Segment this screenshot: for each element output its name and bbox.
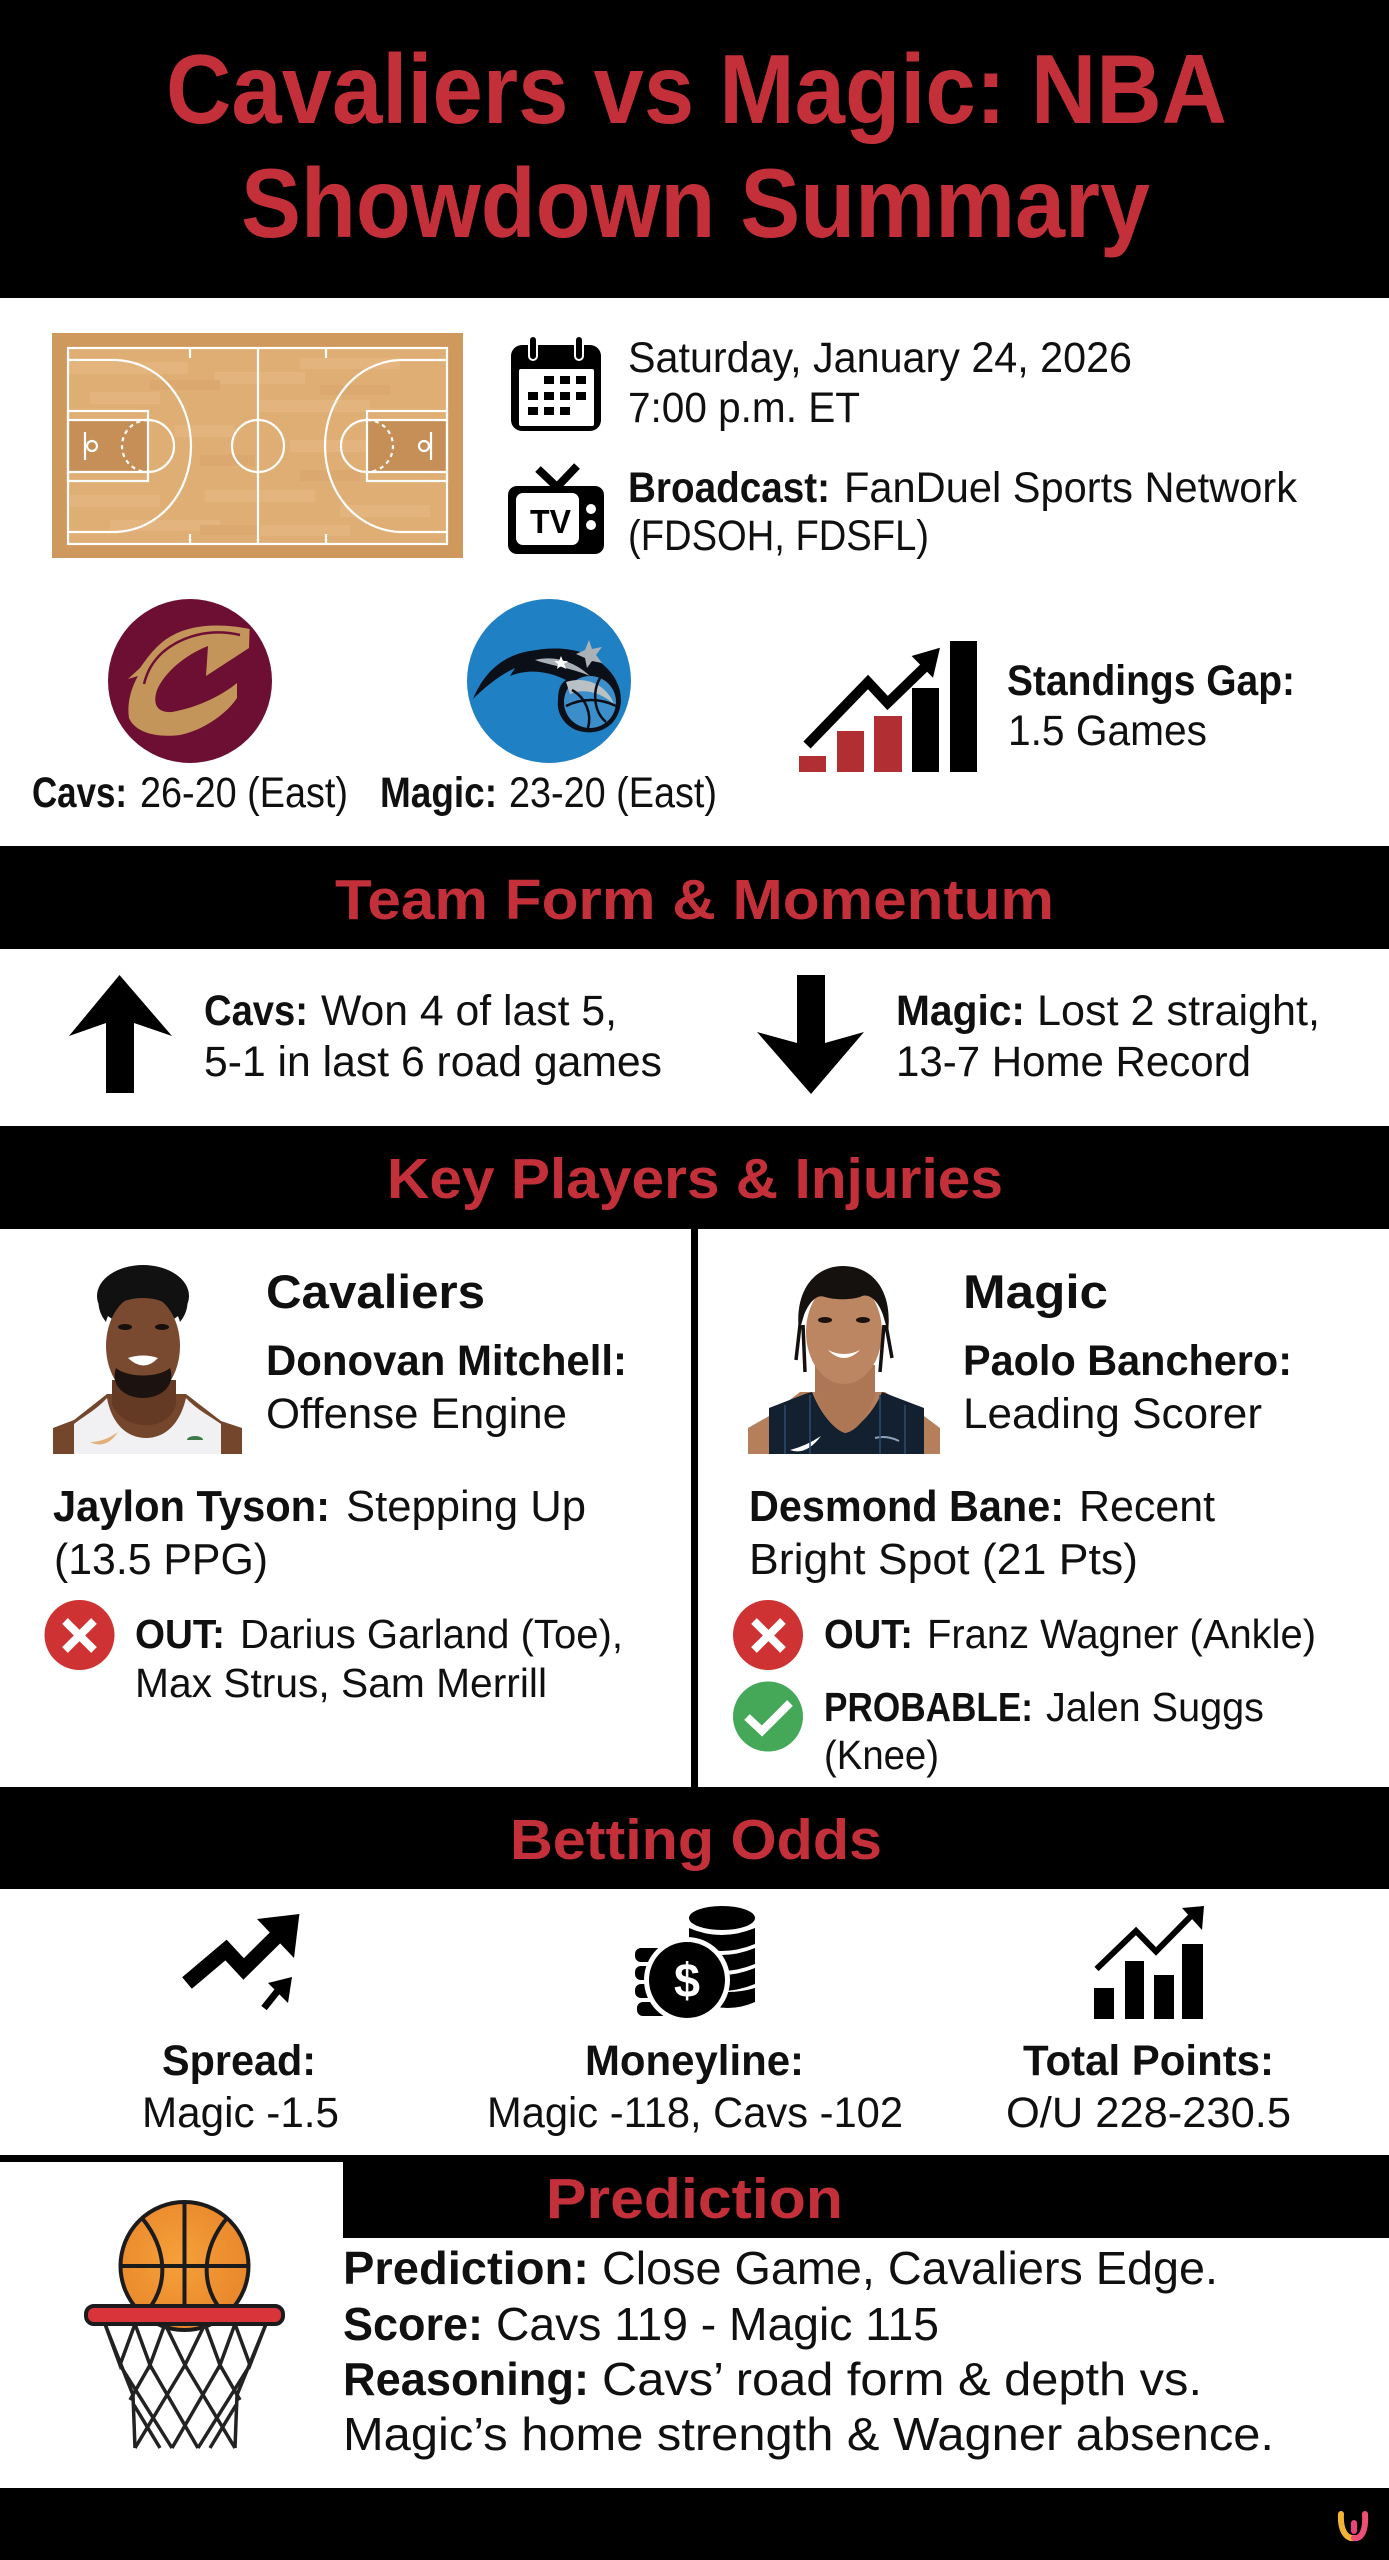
date and time text: 7:00 p.m. ET [628, 385, 860, 432]
icon: basketball hoop [86, 2202, 283, 2448]
heading: Team Form & Momentum: Team Form & Momentum [335, 868, 1054, 932]
moneyline text: Magic -118, Cavs -102 [487, 2090, 903, 2137]
Cavaliers injuries text: Max Strus, Sam Merrill [135, 1660, 547, 1706]
arrow: Magic down [757, 975, 864, 1094]
icon: television: TV [530, 503, 571, 540]
heading: Key Players & Injuries: Key Players & Injuries [387, 1147, 1003, 1211]
standings gap text: Standings Gap: [1007, 658, 1295, 705]
Magic probable text: (Knee) [824, 1732, 939, 1778]
title banner: Showdown Summary [241, 148, 1150, 258]
icon: coin stacks [635, 1906, 755, 2023]
Desmond Bane text: Bright Spot (21 Pts) [749, 1535, 1138, 1584]
Cavaliers injuries text: Darius Garland (Toe), [240, 1611, 623, 1657]
team name: Cavaliers: Cavaliers [266, 1265, 485, 1318]
basketball court illustration [52, 333, 463, 558]
Jaylon Tyson text: Jaylon Tyson: [53, 1482, 330, 1531]
logo: Cavaliers [108, 599, 272, 763]
panel: team form [69, 975, 1320, 1094]
Magic out text: Franz Wagner (Ankle) [927, 1611, 1316, 1657]
Magic form text: Lost 2 straight, [1037, 988, 1320, 1035]
panel: Cavaliers players [44, 1265, 627, 1706]
prediction text: Close Game, Cavaliers Edge. [602, 2242, 1218, 2294]
prediction text: Reasoning: [343, 2353, 589, 2405]
broadcast text: Broadcast: [628, 465, 830, 512]
prediction text: Prediction: [343, 2242, 589, 2294]
Cavs form text: 5-1 in last 6 road games [204, 1039, 662, 1086]
prediction text [343, 2242, 1274, 2460]
player photo: Paolo Banchero [748, 1266, 940, 1454]
heading: Team Form & Momentum [0, 846, 1389, 949]
prediction text: Cavs’ road form & depth vs. [602, 2353, 1202, 2405]
date and time text [628, 335, 1132, 432]
moneyline text [487, 2038, 903, 2137]
Magic record: Magic: [380, 770, 497, 817]
title banner: Cavaliers vs Magic: NBA [166, 34, 1227, 144]
player photo: Donovan Mitchell [53, 1265, 242, 1454]
arrow: Cavs up [69, 975, 172, 1093]
prediction text: Cavs 119 - Magic 115 [496, 2298, 939, 2350]
heading: Betting Odds: Betting Odds [510, 1808, 882, 1872]
team name: Magic: Magic [963, 1265, 1108, 1318]
spread text: Magic -1.5 [142, 2090, 339, 2137]
Magic form text [896, 988, 1320, 1086]
Paolo Banchero text [963, 1338, 1292, 1438]
Desmond Bane text [749, 1482, 1215, 1584]
prediction text: Magic’s home strength & Wagner absence. [343, 2408, 1274, 2460]
Cavs form text: Won 4 of last 5, [321, 988, 617, 1035]
icon: coin stacks: $ [674, 1955, 700, 2008]
icon: probable check [733, 1682, 803, 1752]
spread text: Spread: [162, 2038, 316, 2085]
Paolo Banchero text: Leading Scorer [963, 1391, 1262, 1438]
Donovan Mitchell text: Offense Engine [266, 1391, 567, 1438]
Magic record: 23-20 (East) [509, 770, 717, 817]
Cavs record: 26-20 (East) [140, 770, 348, 817]
Cavaliers injuries text: OUT: [135, 1611, 225, 1657]
title banner [0, 0, 1389, 298]
date and time text: Saturday, January 24, 2026 [628, 335, 1132, 382]
heading: Prediction: Prediction [546, 2167, 843, 2231]
heading: Key Players & Injuries [0, 1126, 1389, 1229]
Magic out text: OUT: [824, 1611, 913, 1657]
icon: total points chart [1094, 1906, 1204, 2019]
footer bar [0, 2488, 1389, 2560]
moneyline text: Moneyline: [585, 2038, 804, 2085]
broadcast text [628, 465, 1298, 560]
Jaylon Tyson text [53, 1482, 586, 1584]
Donovan Mitchell text: Donovan Mitchell: [266, 1338, 627, 1385]
Magic form text: Magic: [896, 988, 1025, 1035]
icon: out [733, 1600, 803, 1670]
Cavs form text: Cavs: [204, 988, 308, 1035]
spread text [142, 2038, 339, 2137]
total points text: O/U 228-230.5 [1006, 2090, 1291, 2137]
Paolo Banchero text: Paolo Banchero: [963, 1338, 1292, 1385]
Cavs form text [204, 988, 662, 1086]
total points text [1006, 2038, 1291, 2137]
Magic probable text [824, 1684, 1264, 1778]
icon: corner logo [1341, 2514, 1365, 2538]
panel: Magic players [733, 1265, 1316, 1778]
icon: spread arrows [187, 1914, 299, 2008]
Jaylon Tyson text: (13.5 PPG) [54, 1535, 268, 1584]
Donovan Mitchell text [266, 1338, 627, 1438]
icon: standings bar chart [799, 641, 977, 772]
standings gap text [1007, 658, 1295, 755]
heading: Prediction [0, 2155, 1389, 2238]
panel: betting odds [142, 1906, 1291, 2137]
standings gap text: 1.5 Games [1008, 708, 1207, 755]
Cavs record: Cavs: [32, 770, 127, 817]
panel: prediction [86, 2202, 1274, 2460]
panel divider [691, 1229, 698, 1787]
broadcast text: FanDuel Sports Network [844, 465, 1298, 512]
prediction text: Score: [343, 2298, 483, 2350]
icon: television [508, 466, 604, 554]
Cavaliers injuries text [135, 1611, 623, 1706]
Jaylon Tyson text: Stepping Up [346, 1482, 586, 1531]
Magic form text: 13-7 Home Record [896, 1039, 1251, 1086]
Desmond Bane text: Desmond Bane: [749, 1482, 1064, 1531]
panel: game information [32, 333, 1298, 817]
logo: Magic [467, 599, 631, 763]
total points text: Total Points: [1023, 2038, 1274, 2085]
heading: Betting Odds [0, 1787, 1389, 1889]
Magic probable text: Jalen Suggs [1046, 1684, 1264, 1730]
Desmond Bane text: Recent [1079, 1482, 1215, 1531]
broadcast text: (FDSOH, FDSFL) [628, 513, 929, 560]
Magic probable text: PROBABLE: [824, 1684, 1033, 1730]
icon: out [44, 1600, 114, 1670]
icon: calendar [511, 336, 601, 431]
